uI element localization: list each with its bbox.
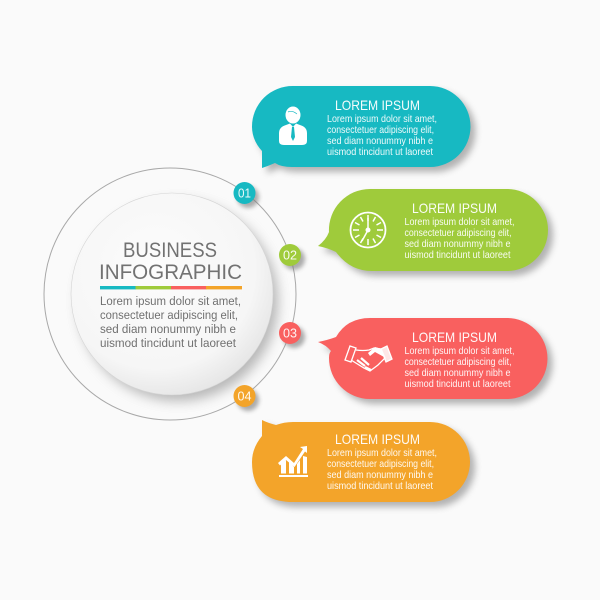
icon: businessman: [279, 106, 307, 145]
marker 01: [234, 182, 259, 208]
panel 4 text: Lorem ipsum dolor sit amet,: [327, 448, 437, 459]
central body text: [100, 294, 241, 350]
marker 01: 01: [238, 186, 251, 200]
central body text: consectetuer adipiscing elit,: [100, 308, 238, 322]
panel 3 text: sed diam nonummy nibh e: [404, 368, 511, 379]
central heading: BUSINESS: [123, 239, 217, 262]
panel 2 text: uismod tincidunt ut laoreet: [404, 250, 511, 261]
colour bar: [100, 286, 242, 289]
central heading: INFOGRAPHIC: [99, 261, 242, 284]
outer ring: [44, 168, 296, 420]
central heading: [99, 239, 242, 284]
icon: growth chart: [278, 446, 308, 477]
panel 3 text: consectetuer adipiscing elit,: [404, 357, 512, 368]
panel 2 text: sed diam nonummy nibh e: [404, 239, 511, 250]
panel 4 text: sed diam nonummy nibh e: [327, 470, 433, 481]
panel 1: [252, 86, 476, 173]
panel 4 text: consectetuer adipiscing elit,: [327, 459, 434, 470]
panel 3 heading: LOREM IPSUM: [412, 329, 497, 345]
panel 4: [252, 420, 475, 507]
marker 04: [234, 385, 259, 411]
icon: clock: [350, 212, 386, 248]
panel 3: [318, 318, 552, 404]
central circle: [71, 193, 278, 401]
panel 4 heading: LOREM IPSUM: [335, 431, 420, 447]
panel 2 heading: LOREM IPSUM: [412, 200, 497, 216]
panel 1 heading: LOREM IPSUM: [335, 97, 420, 113]
marker 03: [279, 322, 305, 348]
panel 4 text: uismod tincidunt ut laoreet: [327, 481, 433, 492]
panel 2 text: consectetuer adipiscing elit,: [404, 228, 512, 239]
panel 4 text: [327, 448, 437, 492]
panel 3 text: Lorem ipsum dolor sit amet,: [404, 346, 514, 357]
central body text: sed diam nonummy nibh e: [100, 322, 236, 336]
panel 2 text: Lorem ipsum dolor sit amet,: [404, 217, 514, 228]
panel 1 text: sed diam nonummy nibh e: [327, 136, 433, 147]
panel 2: [318, 189, 553, 276]
panel 2 text: [404, 217, 514, 261]
central body text: uismod tincidunt ut laoreet: [100, 336, 237, 350]
panel 3 text: uismod tincidunt ut laoreet: [404, 379, 511, 390]
marker 02: [279, 244, 305, 270]
panel 1 text: uismod tincidunt ut laoreet: [327, 147, 433, 158]
central body text: Lorem ipsum dolor sit amet,: [100, 294, 241, 308]
icon: handshake: [345, 346, 392, 371]
panel 1 text: consectetuer adipiscing elit,: [327, 125, 434, 136]
marker 02: 02: [283, 248, 297, 262]
marker 04: 04: [238, 390, 252, 404]
panel 3 text: [404, 346, 514, 390]
panel 1 text: Lorem ipsum dolor sit amet,: [327, 114, 437, 125]
panel 1 text: [327, 114, 437, 158]
marker 03: 03: [283, 326, 297, 340]
